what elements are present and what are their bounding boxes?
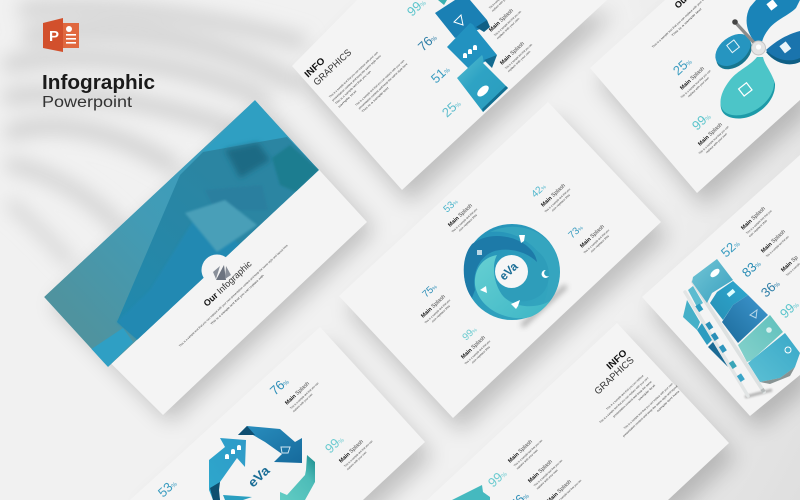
label: This is a sample text that you [464, 339, 491, 366]
label: Main Splash [338, 439, 365, 464]
percent labels: 76% [267, 373, 292, 398]
body text: presentation content and keep the same style here [357, 62, 409, 110]
body text: This is a sample text that you can replace with your own [328, 50, 379, 99]
label: This is a sample text that you can [289, 381, 320, 410]
center logo: eVa [497, 259, 521, 283]
percent labels [485, 465, 532, 500]
percent labels: 52% [718, 235, 743, 260]
panel: ribbon slide [292, 0, 607, 190]
petal chart [709, 0, 800, 119]
label [419, 293, 454, 327]
percent labels: 25% [670, 53, 695, 78]
label: Main Splash [284, 381, 311, 406]
label: This is a sample text that you [765, 234, 790, 258]
label: replace with your own [705, 132, 728, 154]
label: This is a sample text that you [451, 207, 478, 234]
label [507, 433, 546, 471]
body text: sample text [337, 89, 358, 109]
heading [42, 72, 155, 111]
ribbon stack [435, 0, 508, 112]
panel: swirl slide [339, 102, 661, 418]
label: This is a sample text that you can [698, 125, 730, 155]
powerpoint logo [43, 18, 79, 52]
body text [328, 41, 412, 123]
percent labels [718, 235, 800, 321]
percent labels: 53% [442, 196, 461, 215]
stair chart [683, 259, 800, 397]
label: This is a sample text that you can [533, 458, 563, 487]
body text: This is a sample text that you can replace with your own [598, 376, 650, 424]
label: This is a sample text that you can [343, 439, 374, 468]
body text: This is a sample text [361, 86, 390, 113]
heading: Powerpoint [42, 94, 133, 111]
label: Main Splash [499, 41, 526, 66]
panel: petal slide [590, 0, 800, 193]
label: This is a sample text that you [544, 187, 571, 214]
percent labels: 36% [758, 275, 783, 300]
body text: sample text [637, 383, 656, 401]
label: can replace this [748, 218, 768, 238]
label: Main Sp [780, 255, 800, 273]
label: Main Splash [540, 183, 567, 208]
percent labels: 99% [485, 465, 510, 490]
label: replace with your own [507, 49, 532, 73]
label: can replace this [431, 303, 451, 323]
teal block [452, 485, 490, 500]
percent labels: 25% [439, 95, 464, 120]
label: replace with your own [346, 450, 368, 471]
percent labels [155, 373, 347, 500]
label: This is a sample text that you can [513, 438, 543, 467]
label: replace with your own [687, 76, 710, 98]
label: Main Splash [697, 122, 724, 147]
label: This is a sample text that you can [680, 69, 712, 99]
label: This is a sample text that you [583, 228, 610, 255]
arrow cycle [209, 426, 315, 500]
body text: This is a sample text that you can [334, 69, 372, 105]
cover notch with icon [202, 254, 232, 286]
label: can replace this [590, 233, 610, 253]
label: Main Splash [460, 335, 487, 360]
slide title: INFO [303, 56, 328, 80]
label: can replace this [458, 212, 478, 232]
label: replace with your own [535, 468, 559, 490]
cover text: This is a sample text that you can replace with [209, 273, 265, 326]
label: Main Splash [447, 203, 474, 228]
label: This is a sample text that you [745, 209, 773, 235]
body text: presentation content and keep the same style and layout [622, 384, 679, 438]
label: This is a sample text that you can [504, 42, 533, 70]
center logo: eVa [245, 462, 273, 490]
percent labels: 99% [322, 431, 347, 456]
body text: This is a sample text that you can replace with your own [354, 58, 406, 107]
percent labels: 42% [530, 181, 549, 200]
percent labels: 76% [415, 29, 440, 54]
label: replace with your own [496, 16, 521, 40]
percent labels: 51% [428, 61, 453, 86]
panel: arrows slide [130, 327, 425, 500]
cover photo [44, 100, 319, 367]
slide title: GRAPHICS [312, 47, 354, 88]
swirl chart [464, 224, 560, 320]
powerpoint logo: P [49, 28, 59, 45]
label: Main Splash [740, 206, 767, 231]
label: Main Splash [679, 66, 706, 91]
label [446, 202, 481, 236]
swirl shadow [522, 286, 566, 326]
label: This is a sample text that you can [493, 9, 522, 37]
label [578, 223, 613, 257]
panel: stair slide [642, 155, 800, 416]
label [675, 63, 715, 102]
intro text: This is a sample text [670, 7, 703, 37]
label: can replace this [471, 344, 491, 364]
body text: presentation content and keep the same [612, 379, 653, 418]
label: Main Splash [579, 224, 606, 249]
label [539, 182, 574, 216]
label: Main Splash [507, 439, 534, 464]
percent labels: 75% [421, 281, 440, 300]
body text: sample text here [656, 389, 681, 413]
label [693, 119, 733, 158]
label [459, 334, 494, 368]
label: Main Splash [420, 294, 447, 319]
label [740, 203, 776, 238]
label: Main Splash [760, 229, 787, 254]
cover title: Our Infographic [202, 258, 254, 308]
leaf shadow [10, 8, 300, 262]
percent labels: 99% [461, 324, 480, 343]
percent labels: 53% [155, 475, 180, 500]
label [527, 453, 566, 491]
label: Main Splash [527, 459, 554, 484]
body text: This is a sample text that you can replace [605, 373, 645, 411]
panel: bottom info slide [427, 323, 729, 500]
body text [595, 361, 682, 447]
cover text: This is a sample text that you can replace with your own presentation content and keep the same style and layout here [178, 243, 289, 348]
slide title: INFO [605, 348, 630, 372]
panel: cover slide [44, 100, 367, 415]
label: replace with your own [515, 448, 539, 470]
percent labels [404, 0, 464, 120]
label: can replace this [551, 192, 571, 212]
percent labels [421, 181, 586, 343]
swirl icons [477, 235, 549, 309]
slide title: GRAPHICS [593, 355, 637, 397]
label: replace with your own [292, 392, 314, 413]
percent labels [670, 53, 714, 133]
body text: presentation content and keep the same style here [331, 54, 382, 102]
percent labels: 99% [689, 108, 714, 133]
heading: Infographic [42, 72, 155, 94]
label: Main Splash [488, 8, 515, 33]
body text: This is a sample text that you can replace with your own [623, 382, 674, 430]
percent labels: 73% [567, 222, 586, 241]
label: This is a sample text that you [424, 298, 451, 325]
percent labels: 83% [739, 255, 764, 280]
